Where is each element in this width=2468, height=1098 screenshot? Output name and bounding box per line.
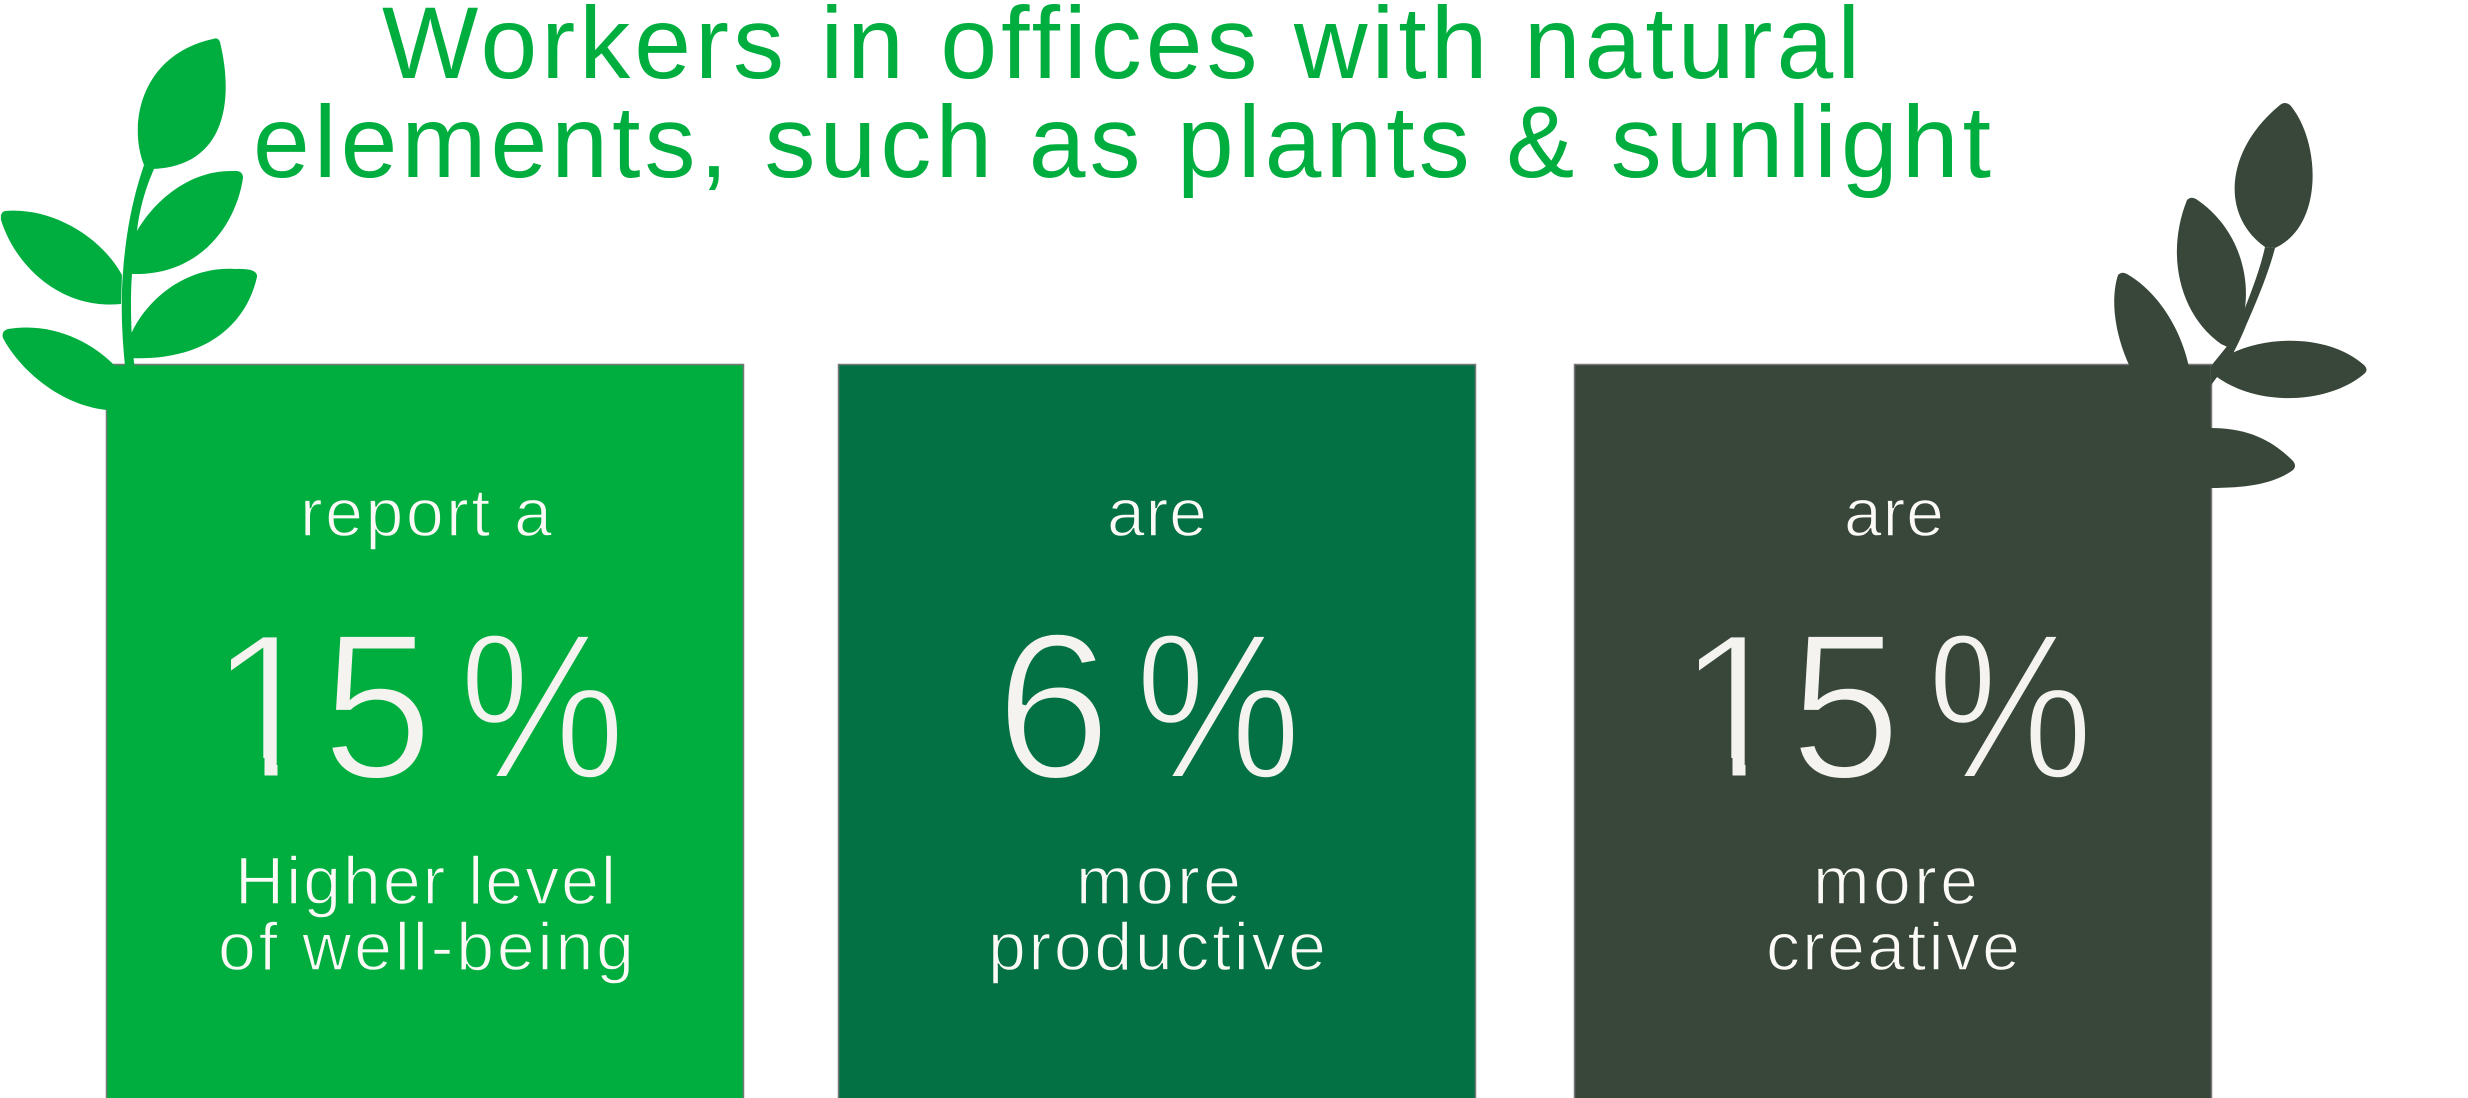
text: more productive: more (1076, 843, 1241, 919)
stat: 15% (1676, 591, 2094, 823)
panel: productive (838, 364, 1476, 1098)
text: more creative: creative (1766, 909, 2020, 985)
stat: 6%: 6 (996, 591, 1111, 823)
stat: 15%: 1 (208, 591, 324, 823)
text: higher level of well-being: Higher level (235, 843, 616, 919)
panel: well-being (106, 364, 744, 1098)
text: higher level of well-being: of well-being (218, 909, 634, 985)
text: more creative (1766, 843, 2020, 985)
panel: creative (1574, 364, 2212, 1098)
stat: 6%: % (1135, 591, 1302, 823)
icon: dark plant (2114, 103, 2366, 488)
stat: 15%: 5 (1790, 591, 1901, 823)
stat: 15%: % (1927, 591, 2094, 823)
stat: 15%: % (459, 591, 626, 823)
text: more creative: more (1813, 843, 1978, 919)
stat: 6% (996, 591, 1302, 823)
title: elements, such as plants & sunlight (253, 85, 1991, 199)
text: are: are (1844, 475, 1944, 551)
text: report a: report a (300, 475, 552, 551)
icon: green plant (1, 38, 257, 416)
stat: 15%: 1 (1676, 591, 1792, 823)
title (253, 0, 1991, 199)
stat: 15% (208, 591, 626, 823)
text: higher level of well-being (218, 843, 634, 985)
text: are: are (1107, 475, 1207, 551)
text: more productive (988, 843, 1326, 985)
text: more productive: productive (988, 909, 1326, 985)
stat: 15%: 5 (322, 591, 433, 823)
